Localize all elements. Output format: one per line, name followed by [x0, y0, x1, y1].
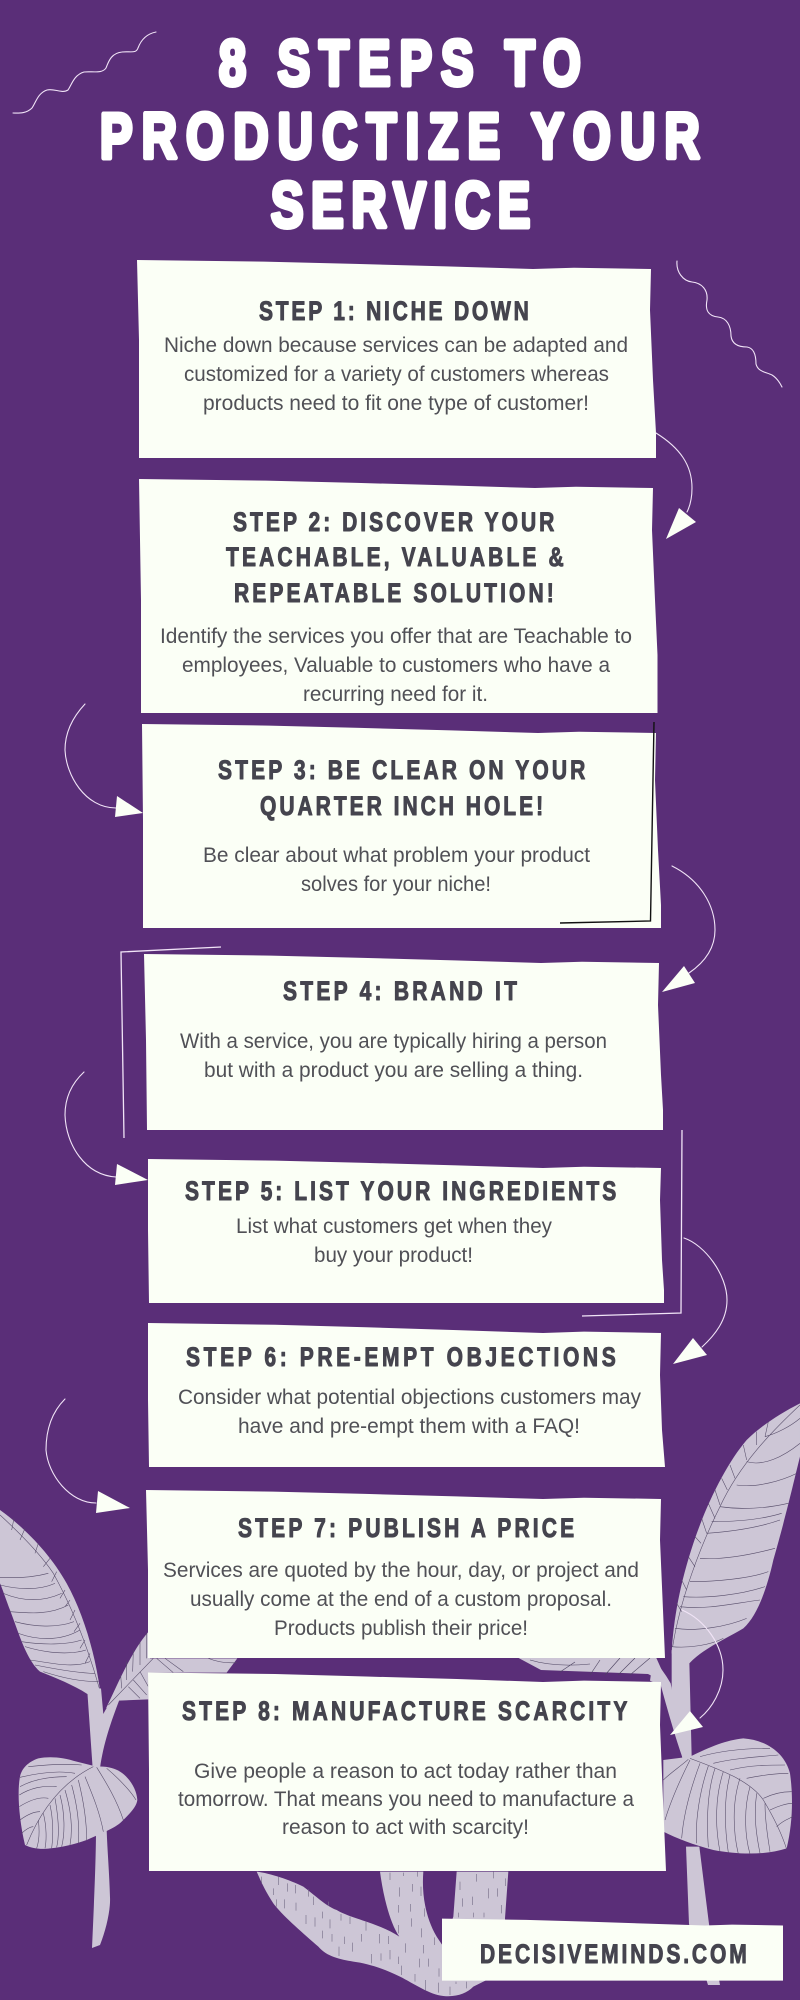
title: SERVICE	[271, 171, 530, 242]
arrow: step 2 to step 3	[65, 704, 143, 817]
heading: step 1: STEP 1: NICHE DOWN	[259, 297, 529, 327]
heading: step 4: STEP 4: BRAND IT	[283, 977, 517, 1007]
arrow: step 5 to step 6	[673, 1238, 727, 1364]
bottom plant illustration	[257, 1872, 508, 1996]
panel: step 1	[137, 260, 656, 458]
panel: step 2	[139, 479, 658, 713]
heading: step 3	[218, 756, 585, 822]
text: step 6 body	[178, 1386, 641, 1438]
heading: step 6: STEP 6: PRE-EMPT OBJECTIONS	[186, 1343, 616, 1373]
text: step 6 body: have and pre-empt them with a FAQ!	[238, 1415, 580, 1438]
heading: step 2: REPEATABLE SOLUTION!	[234, 579, 554, 609]
arrow: step 1 to step 2	[656, 433, 696, 539]
text: step 7 body: Products publish their price!	[274, 1617, 528, 1640]
heading: step 5: STEP 5: LIST YOUR INGREDIENTS	[185, 1177, 616, 1207]
text: step 3 body: solves for your niche!	[301, 873, 491, 896]
title: PRODUCTIZE YOUR	[100, 102, 700, 173]
right plant branch leaf between steps 7 and 8	[513, 1655, 668, 1684]
panel: step 8	[148, 1672, 666, 1871]
text: step 2 body: Identify the services you offer that are Teachable to	[160, 625, 632, 648]
footer website label: DECISIVEMINDS.COM	[480, 1940, 747, 1970]
text: step 2 body	[160, 625, 632, 706]
text: step 6 body: Consider what potential objections customers may	[178, 1386, 641, 1409]
footer website label	[442, 1919, 783, 1981]
title: 8 STEPS TO	[219, 29, 581, 100]
squiggle: top left	[13, 32, 156, 113]
arrow: step 7 to step 8	[670, 1610, 723, 1735]
text: step 1 body: products need to fit one type of customer!	[203, 392, 589, 415]
heading: step 8: STEP 8: MANUFACTURE SCARCITY	[182, 1697, 627, 1727]
text: step 4 body	[180, 1030, 607, 1082]
text: step 8 body	[178, 1760, 634, 1839]
text: step 1 body: customized for a variety of customers whereas	[184, 363, 609, 386]
heading: step 3: QUARTER INCH HOLE!	[260, 792, 543, 822]
arrow: step 6 to step 7	[46, 1399, 130, 1513]
text: step 7 body	[163, 1559, 639, 1640]
text: step 7 body: Services are quoted by the hour, day, or project and	[163, 1559, 639, 1582]
text: step 3 body: Be clear about what problem your product	[203, 844, 590, 867]
heading: step 2	[226, 508, 564, 609]
text: step 1 body	[164, 334, 628, 415]
text: step 4 body: but with a product you are selling a thing.	[204, 1059, 583, 1082]
heading: step 3: STEP 3: BE CLEAR ON YOUR	[218, 756, 585, 786]
text: step 3 body	[203, 844, 590, 896]
title	[100, 29, 700, 242]
text: step 1 body: Niche down because services can be adapted and	[164, 334, 628, 357]
text: step 5 body	[236, 1215, 552, 1267]
squiggle: top right	[677, 261, 782, 387]
left plant illustration	[0, 1510, 237, 1948]
right plant illustration	[650, 1403, 800, 1985]
panel: step 5	[148, 1159, 664, 1303]
panel: step 6	[148, 1323, 665, 1467]
text: step 5 body: buy your product!	[314, 1244, 473, 1267]
text: step 8 body: reason to act with scarcity!	[282, 1816, 529, 1839]
heading: step 2: STEP 2: DISCOVER YOUR	[233, 508, 554, 538]
text: step 8 body: Give people a reason to act today rather than	[194, 1760, 617, 1783]
panel: step 3	[142, 724, 661, 928]
text: step 2 body: recurring need for it.	[303, 683, 488, 706]
arrow: step 4 to step 5	[65, 1072, 148, 1185]
panel: step 4	[144, 954, 663, 1130]
frame line: step 4 corner	[121, 947, 221, 1138]
text: step 7 body: usually come at the end of a custom proposal.	[190, 1588, 612, 1611]
heading: step 7: STEP 7: PUBLISH A PRICE	[238, 1514, 574, 1544]
arrow: step 3 to step 4	[662, 866, 715, 992]
panel: step 7	[146, 1490, 665, 1658]
frame line: step 3 corner	[560, 722, 654, 923]
heading: step 2: TEACHABLE, VALUABLE &	[226, 543, 564, 573]
text: step 2 body: employees, Valuable to customers who have a	[182, 654, 610, 677]
text: step 8 body: tomorrow. That means you need to manufacture a	[178, 1788, 634, 1811]
frame line: step 5 corner	[582, 1130, 682, 1316]
text: step 4 body: With a service, you are typically hiring a person	[180, 1030, 607, 1053]
text: step 5 body: List what customers get when they	[236, 1215, 552, 1238]
